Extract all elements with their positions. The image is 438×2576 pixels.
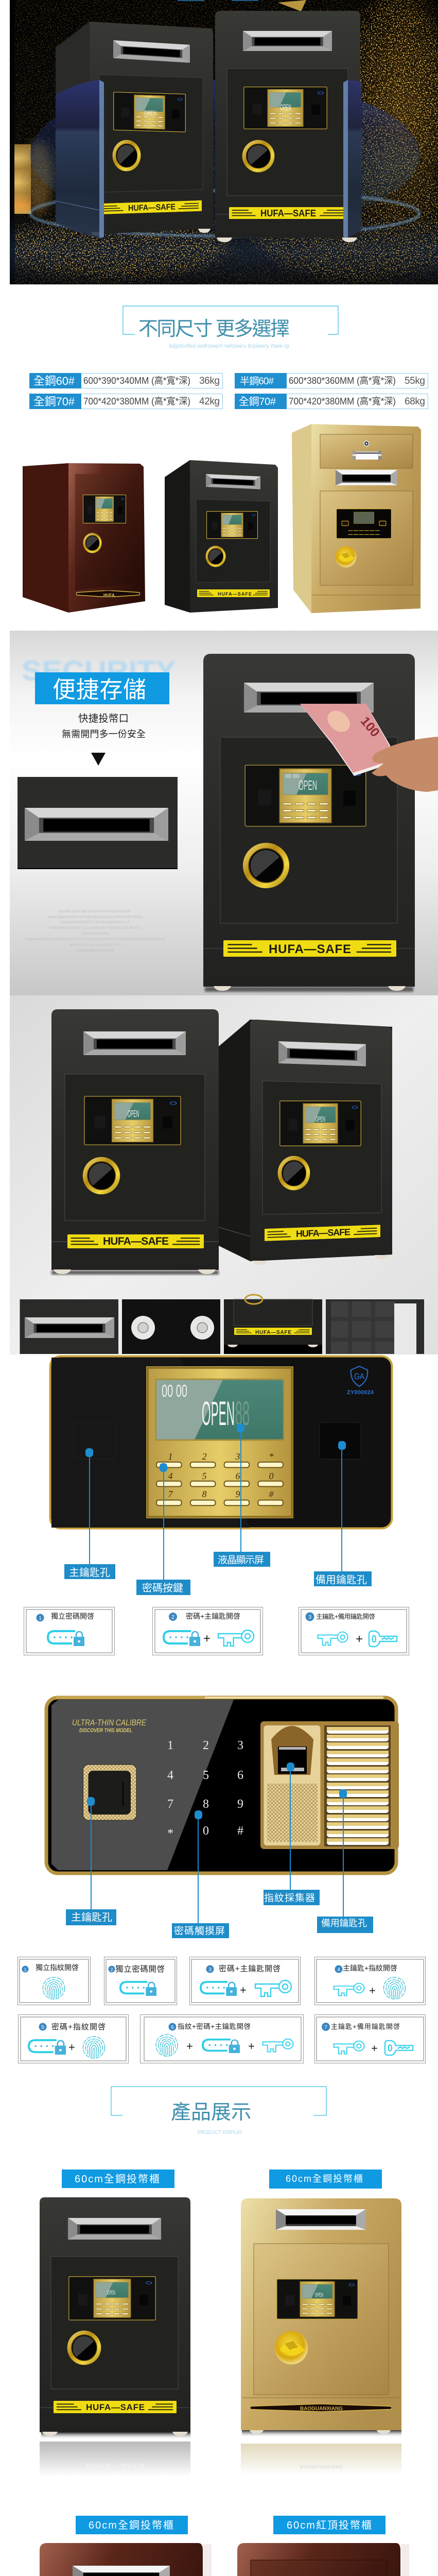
mode card 6: fingerprint plus password plus key (140, 2014, 304, 2063)
product label: 60cm全鋼投幣櫃 (75, 2173, 160, 2185)
detail: coin slot close-up (17, 777, 178, 869)
mode card: main key plus backup key: 主鑰匙+備用鑰匙開啓 (316, 1613, 375, 1620)
product label (273, 2516, 386, 2534)
callout: touch screen: 密碼觸摸屏 (174, 1925, 225, 1937)
heading: different sizes more choices: 不同尺寸 更多選擇 (138, 318, 290, 340)
keypad digits: 5 (202, 1471, 207, 1481)
heading: product display (111, 2087, 326, 2136)
safe: right front black safe: OPEN (280, 103, 291, 112)
ghost word: SECURITY (22, 655, 176, 686)
mode card 4: key plus fingerprint (315, 1957, 425, 2005)
callout: backup key hole (317, 1789, 373, 1933)
mode card 3: password plus key (189, 1957, 301, 2005)
GA badge (347, 1366, 374, 1396)
spec row: half steel 60 (235, 373, 428, 388)
spec row: full steel 70 left: 42kg (199, 396, 220, 407)
product: 60cm gold coin safe: BAOGUANXIANG (300, 2406, 343, 2412)
mode card: password plus main key (152, 1607, 262, 1655)
spec row: full steel 70 left (29, 394, 222, 409)
callout: LCD display: 液晶顯示屏 (218, 1554, 264, 1566)
mode card 2: password: 獨立密碼開啓 (115, 1964, 165, 1974)
callout: LCD display (214, 1423, 270, 1567)
mode card: password plus main key: + (203, 1632, 211, 1646)
mode card 3: password plus key: + (240, 1984, 247, 1996)
spec row: full steel 60: 全鋼60# (33, 375, 75, 387)
keypad (146, 1366, 293, 1518)
safe: red-brown perspective (23, 463, 145, 613)
product: 60cm gold coin safe (241, 2170, 401, 2476)
panel: lock panel diagram 1 (50, 1356, 392, 1528)
keypad digits (168, 1451, 274, 1499)
product: 60cm black coin safe (40, 2170, 190, 2477)
safe: large front view with banknote: OPEN (299, 777, 317, 793)
thumbnail: base plate (224, 1295, 322, 1354)
keypad digits: 2 (202, 1451, 207, 1462)
keypad digits: 3 (235, 1451, 240, 1462)
mode card: password plus main key: 2 (171, 1614, 174, 1620)
heading: product display: PRODUCT DISPLAY (198, 2130, 242, 2136)
mode card 6: fingerprint plus password plus key: + (186, 2040, 193, 2053)
touch digits: # (237, 1824, 243, 1838)
mode card 7: key plus backup key (315, 2014, 425, 2063)
touch digits: 3 (237, 1739, 243, 1752)
banner: convenient storage: 便捷存儲 (52, 676, 146, 703)
reflection: HUFA—SAFE (86, 2462, 145, 2470)
mode card 1: fingerprint: 獨立指紋開啓 (36, 1963, 79, 1972)
thumbnail: interior (326, 1299, 424, 1354)
callout: main key hole: 主鑰匙孔 (71, 1911, 112, 1923)
panel: lock panel diagram 1: OPEN (202, 1394, 235, 1432)
callout: backup key hole (314, 1441, 372, 1586)
callout: main key hole: 主鑰匙孔 (69, 1567, 110, 1579)
touch digits: 7 (167, 1798, 173, 1811)
touch digits: 8 (203, 1798, 209, 1811)
fine print: SDKASUVTOIERVTY SIFVG DIGDEWO-D T (61, 921, 130, 924)
safe: right front black safe: HUFA—SAFE (260, 208, 316, 218)
heading: different sizes more choices (123, 306, 338, 349)
mode card: independent password (24, 1607, 114, 1655)
model text: ULTRA-THIN CALIBRE (72, 1718, 147, 1727)
fine print: DASKLIVJFDLSKURFOUEWYFIUJW FROUWEODFGWGITDDDGEWTPERTGFGRTUJH (26, 938, 165, 941)
mode card 3: password plus key: 3 (208, 1967, 212, 1973)
GA badge: ZY000024 (347, 1389, 374, 1396)
callout: fingerprint collector: 指紋採集器 (264, 1892, 315, 1904)
mode card: main key plus backup key (299, 1607, 409, 1655)
callout: touch screen (172, 1810, 229, 1938)
keypad digits: * (269, 1451, 274, 1462)
fine print (26, 910, 165, 953)
panel: three safe colour options (23, 424, 421, 613)
safe: perspective black right (219, 1020, 392, 1265)
fingerprint unit (260, 1721, 399, 1849)
product label: 60cm全鋼投幣櫃 (89, 2519, 173, 2531)
mode card: password plus main key: 密碼+主鑰匙開啓 (186, 1612, 240, 1620)
safe: front black left: HUFA—SAFE (103, 1235, 169, 1247)
safe: right front black safe (215, 11, 360, 242)
keypad digits: # (269, 1489, 274, 1499)
spec row: half steel 60: 半鋼60# (240, 376, 274, 387)
keypad digits: 8 (202, 1489, 207, 1499)
mode card 5: password plus fingerprint (19, 2014, 129, 2063)
mode card 1: fingerprint (17, 1957, 91, 2005)
reflection: BAOGUANXIANG (300, 2464, 343, 2469)
reflection (40, 2442, 190, 2477)
mode card 7: key plus backup key: 7 (324, 2025, 327, 2030)
safe: perspective black right: HUFA—SAFE (296, 1227, 351, 1239)
text: coin slot description: 無需開門多一份安全 (62, 729, 146, 739)
model text (72, 1718, 147, 1734)
fine print: ACNKSDLFSJAB (82, 932, 109, 936)
fine print: WSKLVFLAVSIHOVFDCFI (69, 943, 121, 947)
safe: front black left (51, 1009, 219, 1275)
touch digits: * (167, 1827, 173, 1840)
safe: large front view with banknote: HUFA—SAFE (269, 942, 351, 956)
panel: convenient storage (10, 631, 438, 995)
spec row: full steel 70 left: 全鋼70# (33, 395, 75, 408)
mode card 3: password plus key: 密碼+主鑰匙開啓 (219, 1964, 281, 1973)
spec row: full steel 70 right: 700*420*380MM (高*寬*深) (289, 396, 396, 406)
callout: password keys (136, 1463, 190, 1595)
blue glass strips (56, 80, 104, 238)
spec row: full steel 70 right: 68kg (405, 396, 425, 407)
product: 60cm gold coin safe: OPEN (315, 2292, 323, 2298)
glowing ring (30, 191, 419, 236)
mode card 6: fingerprint plus password plus key: 指紋+密碼+主鑰匙開啓 (178, 2022, 251, 2030)
panel: hero with black and gold background and two safes (10, 0, 438, 284)
text: coin slot description: 快捷投幣口 (78, 713, 129, 724)
safe: left perspective black safe (56, 22, 213, 236)
safe: front black left: OPEN (128, 1109, 139, 1119)
safe: red-brown perspective: HUFA (103, 593, 115, 598)
keypad digits: 7 (168, 1489, 173, 1499)
touch digits: 1 (167, 1739, 173, 1752)
mode card 6: fingerprint plus password plus key: + (248, 2040, 255, 2053)
spec row: full steel 60: 600*390*340MM (高*寬*深) (83, 376, 190, 386)
blue glass dome (30, 80, 420, 229)
product label (269, 2170, 382, 2189)
touch digits: 4 (167, 1769, 173, 1782)
safe: black perspective (165, 460, 278, 613)
mode card 4: key plus fingerprint: 4 (337, 1967, 340, 1973)
LCD text: 88 (185, 1394, 201, 1432)
heading: product display: 產品展示 (171, 2102, 251, 2124)
fine print: NDSBF,SBF,FSBFIUPGYURTVYIHJVFDASDF (59, 910, 131, 913)
product: 60cm red coin safe (38, 2516, 212, 2576)
touch digits: 0 (203, 1824, 209, 1838)
product label (76, 2516, 188, 2534)
LCD text (162, 1381, 250, 1432)
mode card: main key plus backup key: + (356, 1632, 363, 1646)
mode card 6: fingerprint plus password plus key: 6 (171, 2025, 174, 2030)
mode card 5: password plus fingerprint: 5 (41, 2025, 44, 2030)
touch digits: 6 (237, 1769, 243, 1782)
mode card: main key plus backup key: 3 (308, 1614, 311, 1620)
panel: two black safes on light background (10, 995, 438, 1354)
hand (372, 737, 438, 792)
callout: backup key hole: 備用鑰匙孔 (316, 1574, 367, 1586)
thumbnail: slot (20, 1299, 118, 1354)
safe: gold with drawer (292, 424, 421, 613)
spec row: full steel 70 left: 700*420*380MM (高*寬*深) (83, 396, 190, 406)
product label: 60cm紅頂投幣櫃 (287, 2519, 372, 2531)
product: 60cm black coin safe: HUFA—SAFE (86, 2402, 145, 2412)
gold blob left (14, 144, 31, 214)
touch digits: 9 (237, 1798, 243, 1811)
safe: large front view with banknote: 00 00 (285, 773, 300, 779)
mode card 5: password plus fingerprint: 密碼+指紋開啓 (51, 2023, 106, 2031)
panel: lock panel diagram 1: 88 (235, 1394, 250, 1432)
spec row: half steel 60: 600*380*360MM (高*寬*深) (289, 376, 396, 386)
mode card 7: key plus backup key: + (371, 2042, 378, 2055)
mode card: independent password: 獨立密碼開啓 (51, 1612, 94, 1620)
callout: main key hole (64, 1448, 115, 1579)
text: coin slot description (62, 713, 146, 739)
keypad digits: 1 (168, 1451, 173, 1462)
spec row: full steel 60: 36kg (199, 376, 220, 386)
spec row: half steel 60: 55kg (405, 376, 425, 386)
spec row: full steel 70 right (235, 394, 428, 409)
touch digits: 5 (203, 1769, 209, 1782)
callout: backup key hole: 備用鑰匙孔 (321, 1918, 367, 1928)
mode card 4: key plus fingerprint: + (369, 1984, 376, 1997)
fine print: FNKFBREW DUOFT D:DI UUIG RDI RGEDRI DIG PUIT D (49, 926, 141, 930)
fine print: FSDKJPVDKLISIVFOSVF (76, 949, 115, 953)
mode card: independent password: 1 (39, 1616, 42, 1621)
banknote: 100 (358, 714, 382, 740)
safe: large front view with banknote (203, 654, 438, 992)
product label: 60cm全鋼投幣櫃 (286, 2174, 363, 2184)
touch digits (167, 1739, 243, 1840)
product label (62, 2170, 174, 2188)
product: 60cm red-top safe (235, 2516, 409, 2576)
keypad digits: 9 (236, 1489, 240, 1499)
keypad digits: 0 (269, 1471, 274, 1481)
safe: left perspective black safe: OPEN (144, 109, 156, 117)
model text: DISCOVER THIS MODEL (79, 1727, 132, 1734)
mode card 2: password: 2 (110, 1967, 113, 1972)
banknote (300, 704, 397, 776)
spec table (29, 373, 428, 409)
product: 60cm black coin safe: OPEN (107, 2289, 115, 2296)
key hole (83, 1765, 136, 1820)
mode card 2: password (104, 1957, 177, 2005)
mode card 4: key plus fingerprint: 主鑰匙+指紋開啓 (343, 1964, 397, 1972)
mode card 7: key plus backup key: 主鑰匙+備用鑰匙開啓 (331, 2023, 400, 2030)
spec row: full steel 60 (29, 373, 222, 388)
touch digits: 2 (203, 1739, 209, 1752)
safe: black perspective: HUFA—SAFE (218, 591, 252, 597)
mode card 1: fingerprint: 1 (24, 1967, 27, 1972)
spec row: full steel 70 right: 全鋼70# (239, 396, 276, 408)
GA badge: GA (354, 1371, 365, 1381)
safe: perspective black right: OPEN (316, 1115, 325, 1124)
callout: fingerprint collector (264, 1762, 320, 1905)
panel: fingerprint lock diagram (46, 1698, 399, 1873)
safe: left perspective black safe: HUFA—SAFE (128, 202, 176, 213)
keypad digits: 6 (236, 1471, 240, 1481)
keypad digits: 4 (168, 1471, 173, 1481)
heading: different sizes more choices: bdjsfsvflsrj wofrowerf rwrtowiru ttrpiwery rtwie rp (169, 343, 289, 349)
callout: password keys: 密碼按鍵 (142, 1582, 183, 1594)
mode card 5: password plus fingerprint: + (68, 2041, 75, 2054)
callout: main key hole (66, 1797, 116, 1925)
thumbnail: base plate: HUFA—SAFE (255, 1330, 291, 1335)
arrow: down triangle (91, 753, 106, 766)
fine print: DSNKSBDDJUSDEYRFYWJVRSHJFAVDLSVFIRYORTOPER (47, 916, 143, 919)
thumbnail: backup key covers (122, 1299, 220, 1354)
LCD text: 00 00 (162, 1381, 187, 1400)
reflection (241, 2444, 401, 2476)
banner: convenient storage (35, 672, 169, 704)
